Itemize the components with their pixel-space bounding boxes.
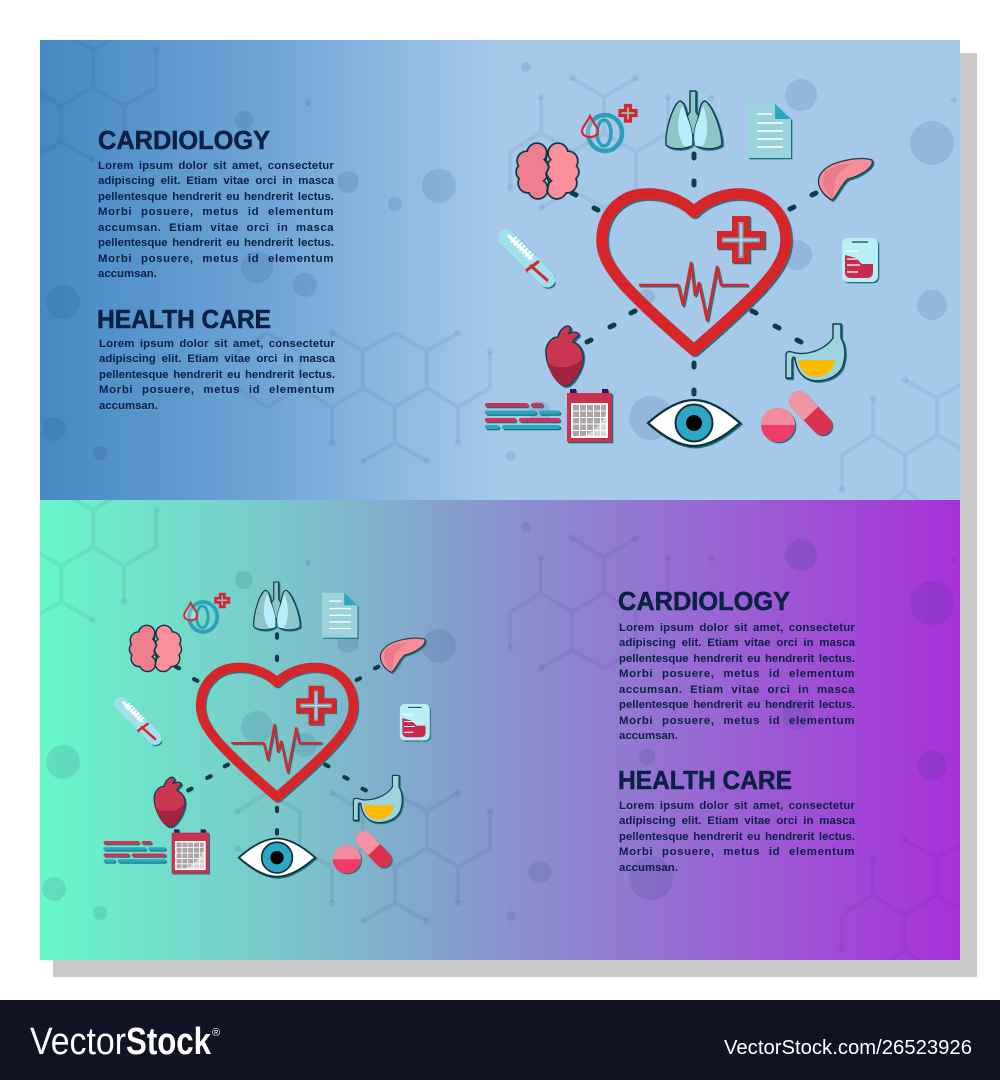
- logo: VectorStock wordmark: Stock: [126, 1021, 212, 1063]
- text block: top Cardiology body: Morbi posuere, metus id elementum: [98, 206, 334, 218]
- logo: VectorStock wordmark: [30, 1021, 220, 1063]
- text block: bottom Cardiology body: Morbi posuere, metus id elementum: [619, 714, 855, 726]
- text block: bottom Health Care body: [619, 800, 856, 874]
- panel: bottom green-purple banner: [29, 492, 965, 965]
- logo: VectorStock wordmark: Vector: [30, 1021, 126, 1063]
- heading: top Cardiology: CARDIOLOGY: [98, 127, 270, 155]
- panel: top blue banner: [29, 32, 965, 505]
- illustration: bottom medical icon cluster: [105, 582, 430, 877]
- text block: top Health Care body: accumsan.: [99, 400, 158, 412]
- heading: top Health Care: HEALTH CARE: [97, 306, 271, 334]
- drop shadow behind panels: [53, 53, 977, 977]
- text block: bottom Cardiology body: [619, 622, 856, 742]
- text block: bottom Cardiology body: Lorem ipsum dolor sit amet, consectetur: [619, 622, 855, 634]
- text block: top Health Care body: Lorem ipsum dolor sit amet, consectetur: [99, 338, 335, 350]
- text block: top Health Care body: pellentesque hendrerit eu hendrerit lectus.: [99, 368, 335, 380]
- text block: bottom Health Care body: pellentesque hendrerit eu hendrerit lectus.: [619, 830, 855, 842]
- footer bar: [0, 1000, 1000, 1080]
- text block: bottom Health Care body: adipiscing elit. Etiam vitae orci in masca: [619, 815, 855, 827]
- text block: top Cardiology body: pellentesque hendrerit eu hendrerit lectus.: [98, 237, 334, 249]
- text block: top Cardiology body: [98, 160, 334, 280]
- text block: top Cardiology body: pellentesque hendrerit eu hendrerit lectus.: [98, 190, 334, 202]
- logo: VectorStock wordmark: ®: [212, 1027, 220, 1039]
- text block: top Cardiology body: accumsan. Etiam vitae orci in masca: [98, 222, 334, 234]
- heading: bottom Cardiology: CARDIOLOGY: [618, 588, 790, 616]
- text block: top Health Care body: Morbi posuere, metus id elementum: [99, 384, 335, 396]
- text block: bottom Cardiology body: accumsan. Etiam vitae orci in masca: [619, 684, 855, 696]
- text block: bottom Cardiology body: adipiscing elit. Etiam vitae orci in masca: [619, 637, 855, 649]
- text block: top Cardiology body: accumsan.: [98, 268, 157, 280]
- illustration: top medical icon cluster: [487, 91, 878, 446]
- text block: bottom Cardiology body: accumsan.: [619, 730, 678, 742]
- text block: bottom Cardiology body: pellentesque hendrerit eu hendrerit lectus.: [619, 652, 855, 664]
- text block: top Cardiology body: Morbi posuere, metus id elementum: [98, 252, 334, 264]
- text block: top Cardiology body: adipiscing elit. Etiam vitae orci in masca: [98, 175, 334, 187]
- text block: bottom Cardiology body: Morbi posuere, metus id elementum: [619, 668, 855, 680]
- text block: bottom Health Care body: accumsan.: [619, 862, 678, 874]
- footer image id: VectorStock.com/26523926: [724, 1037, 972, 1059]
- text block: top Health Care body: adipiscing elit. Etiam vitae orci in masca: [99, 353, 335, 365]
- text block: bottom Health Care body: Morbi posuere, metus id elementum: [619, 846, 855, 858]
- text block: bottom Health Care body: Lorem ipsum dolor sit amet, consectetur: [619, 800, 855, 812]
- text block: bottom Cardiology body: pellentesque hendrerit eu hendrerit lectus.: [619, 699, 855, 711]
- text block: top Cardiology body: Lorem ipsum dolor sit amet, consectetur: [98, 160, 334, 172]
- text block: top Health Care body: [99, 338, 336, 412]
- heading: bottom Health Care: HEALTH CARE: [618, 767, 792, 795]
